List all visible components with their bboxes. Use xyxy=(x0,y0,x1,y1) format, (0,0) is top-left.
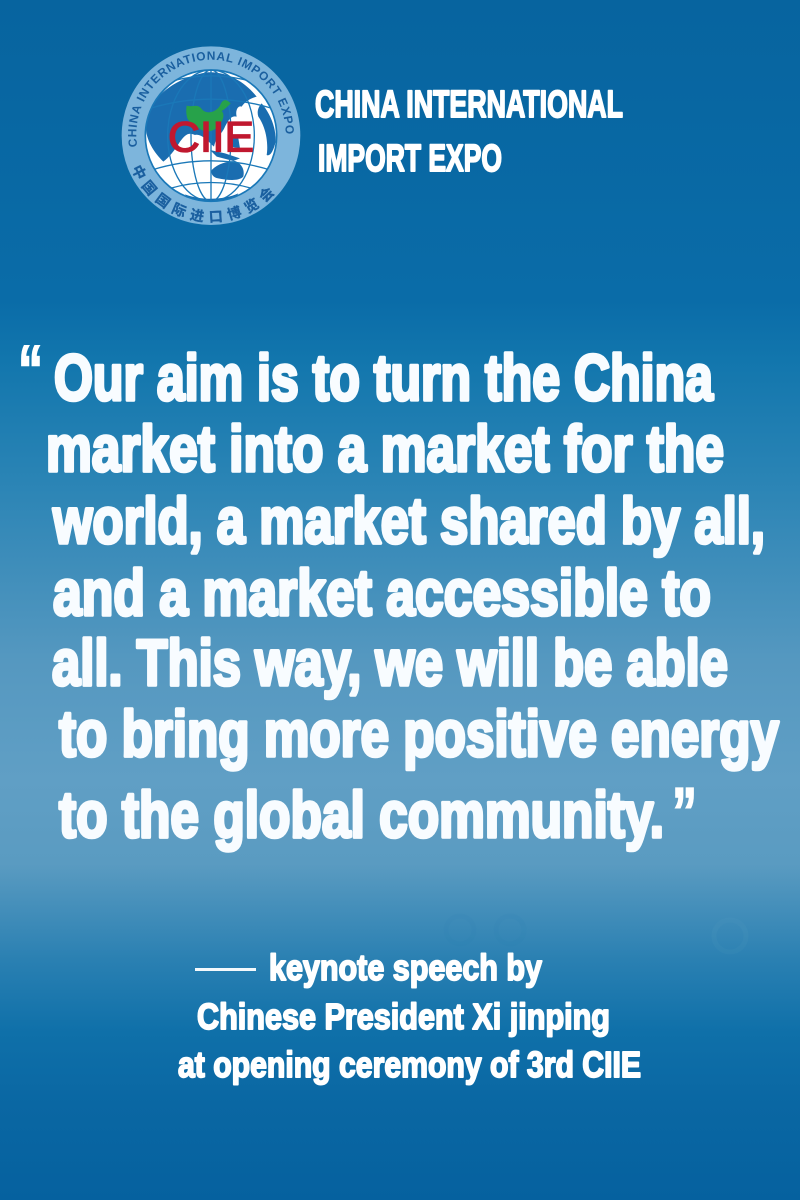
logo: CIIE emblem xyxy=(122,46,300,225)
header line 2: IMPORT EXPO xyxy=(318,138,502,180)
closing quotation mark: ” xyxy=(672,773,697,851)
map: Asia and Europe xyxy=(146,72,257,162)
attribution dash xyxy=(195,968,256,971)
faint watermark xyxy=(446,916,746,952)
attribution line 3: at opening ceremony of 3rd CIIE xyxy=(178,1044,641,1085)
attribution xyxy=(178,947,641,1085)
logo English ring text: CHINA INTERNATIONAL IMPORT EXPO xyxy=(128,52,294,147)
graticule xyxy=(150,70,272,201)
logo globe outline xyxy=(145,70,277,201)
attribution line 1: keynote speech by xyxy=(269,947,542,988)
map: Australia xyxy=(211,161,244,180)
header title xyxy=(315,84,623,180)
opening quotation mark: “ xyxy=(18,331,43,409)
header line 1: CHINA INTERNATIONAL xyxy=(315,84,623,126)
map: Pacific islands and Indonesia xyxy=(210,103,276,161)
map: Antarctic edge xyxy=(185,193,238,202)
logo globe xyxy=(145,70,277,202)
attribution line 2: Chinese President Xi jinping xyxy=(197,996,610,1037)
main quote xyxy=(46,341,779,851)
map: China in green xyxy=(186,100,231,131)
logo CIIE wordmark: CIIE xyxy=(168,113,254,161)
logo Chinese ring text: 中国国际进口博览会 xyxy=(132,164,275,223)
logo outer ring xyxy=(122,46,300,225)
